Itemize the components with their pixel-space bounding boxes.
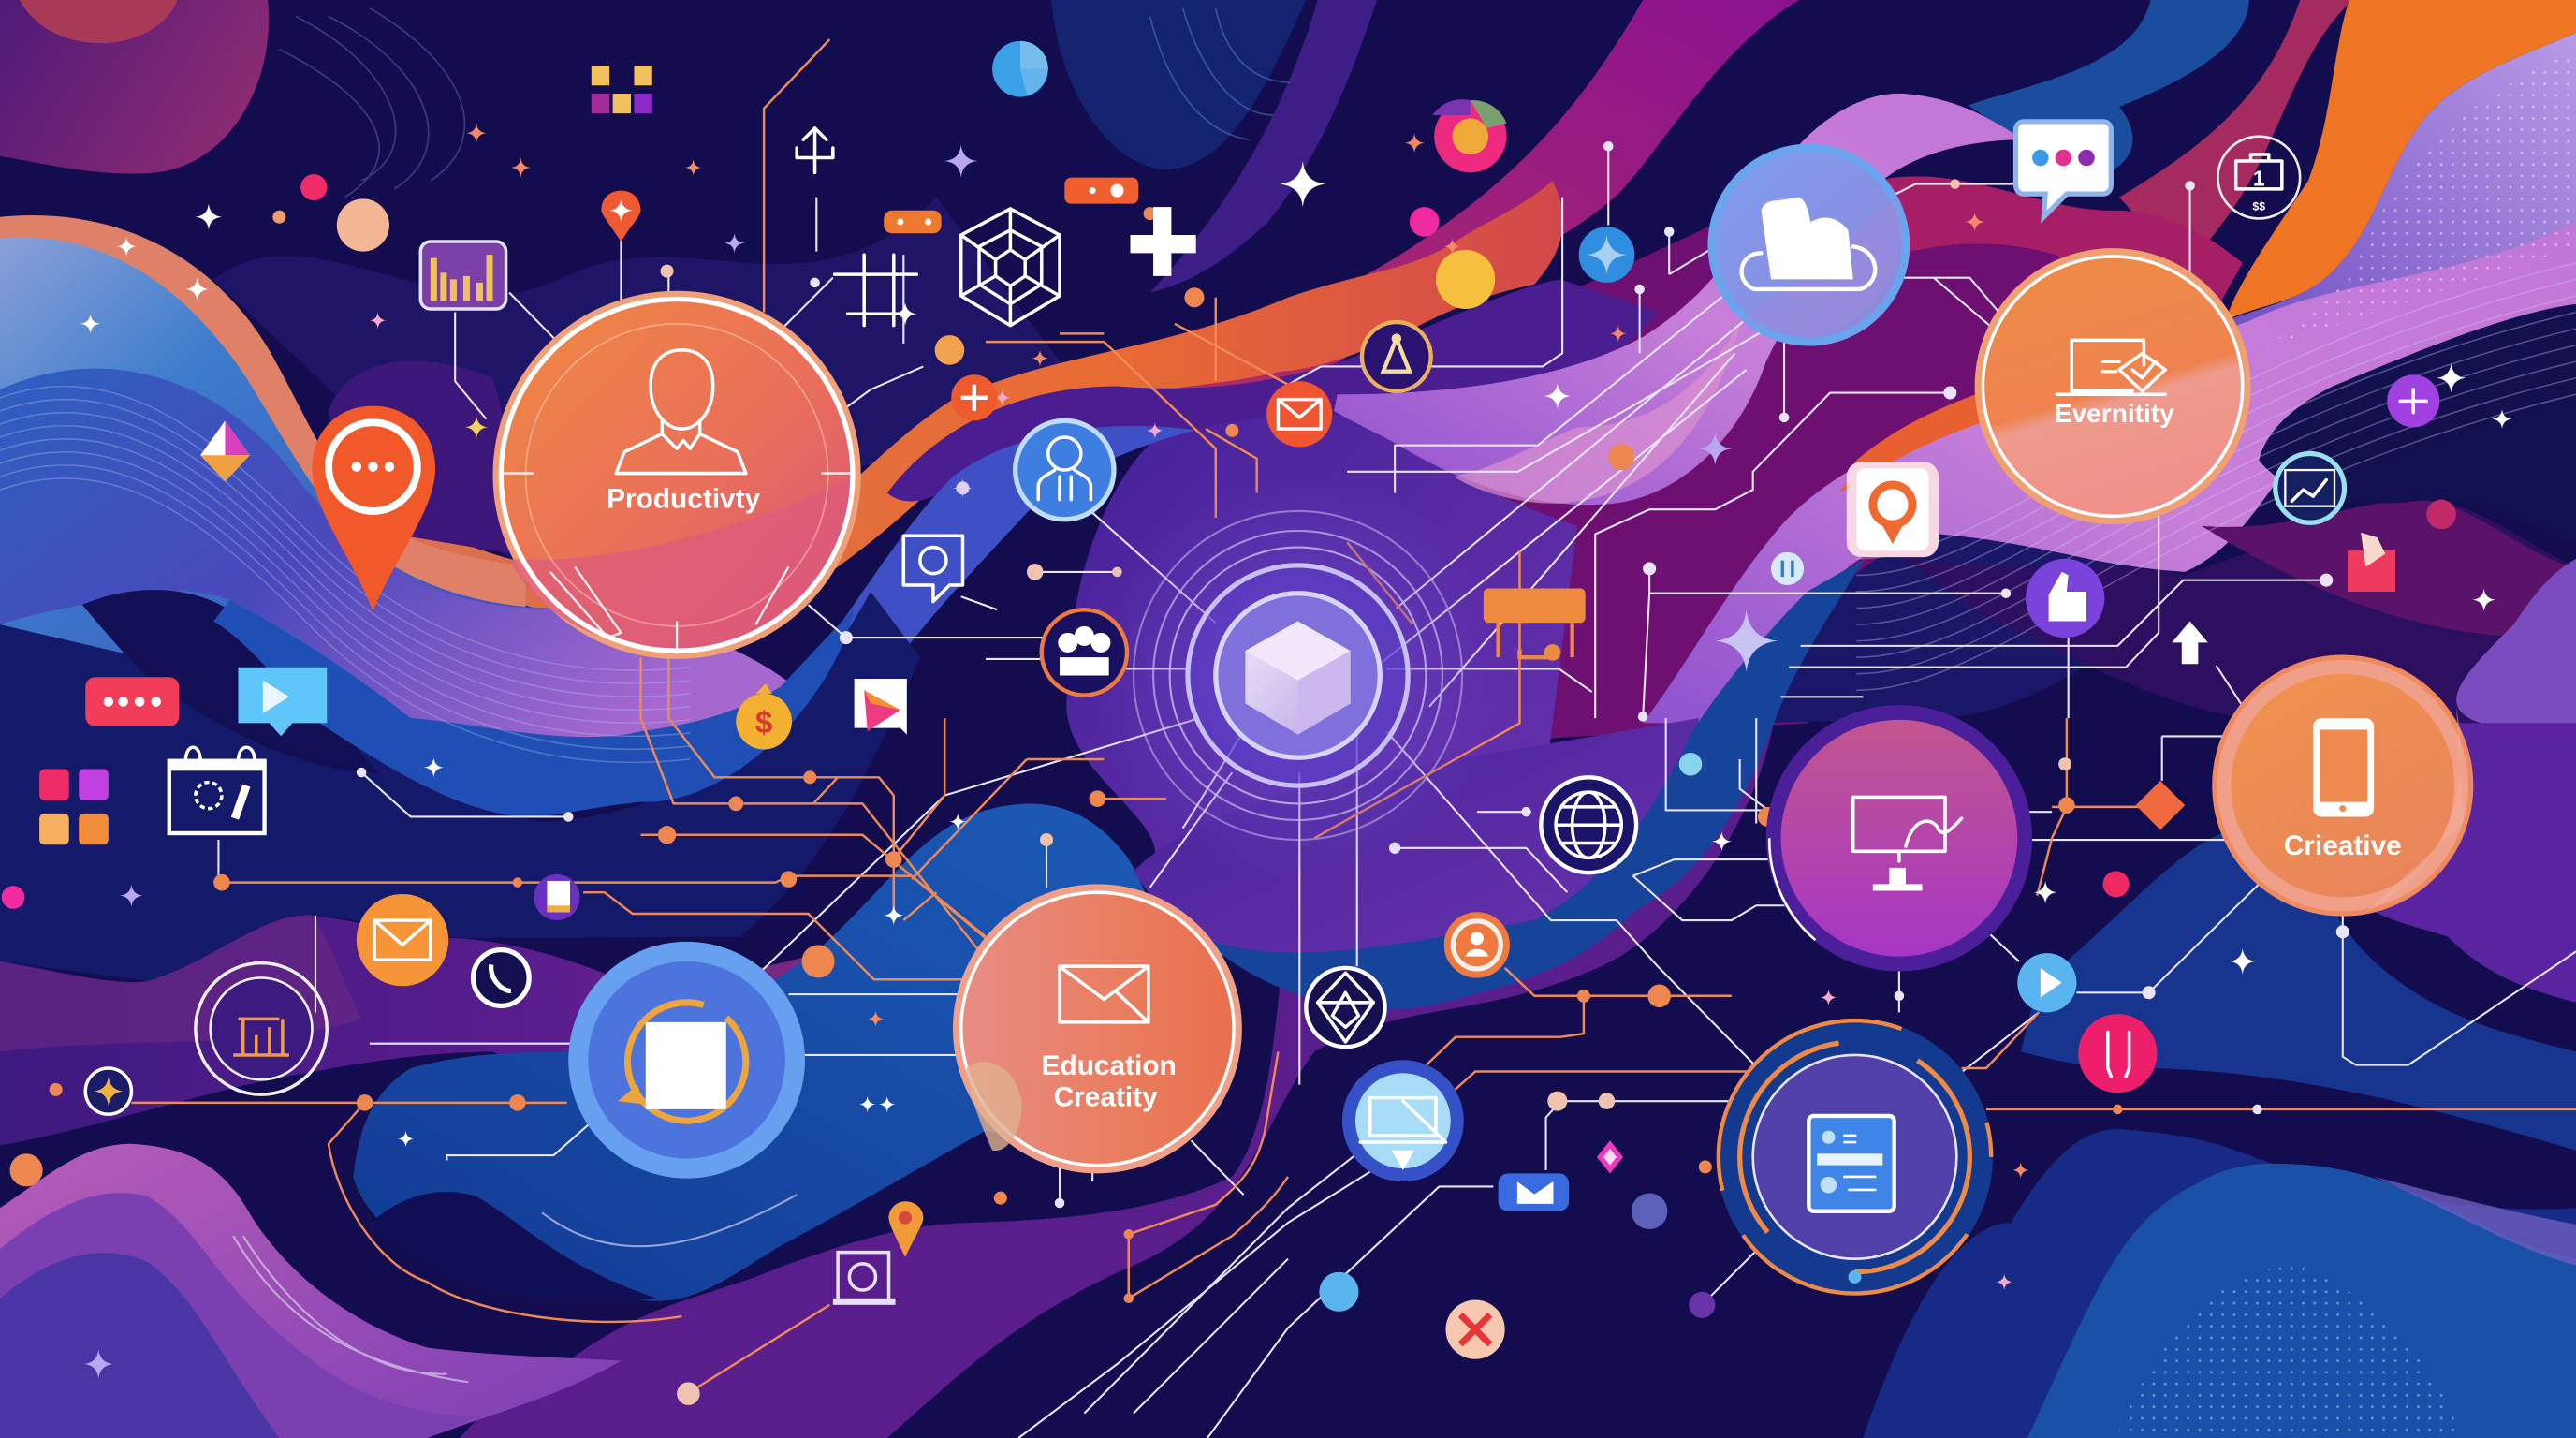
icon: video bubble: [238, 668, 327, 736]
icon: orange bench: [1484, 588, 1586, 661]
node: Education Creatity: [956, 888, 1238, 1170]
icon: play badge: [2017, 953, 2076, 1012]
icon: monitor: [1853, 797, 1962, 861]
left wave: [0, 592, 920, 981]
bottom-left lilac wave: [0, 1144, 621, 1438]
icon: chart ring: [2276, 453, 2345, 522]
icon: red cross: [1445, 1300, 1505, 1359]
icon: person orange ring: [1447, 916, 1506, 975]
icon: triangle ring: [1362, 322, 1431, 391]
decorative dots: [2, 174, 2456, 1318]
icon: briefcase ring: [2217, 137, 2300, 218]
icon: compass diamond: [1306, 968, 1385, 1047]
label: Evernitity: Evernitity: [2055, 399, 2174, 428]
icon: plus: [1131, 207, 1196, 276]
icon: square camera: [833, 1253, 896, 1305]
icon: small info circle: [1771, 552, 1804, 585]
icon: dollar coin: $: [755, 706, 773, 741]
icon: yellow ball: [1436, 250, 1495, 309]
icon: purple plus: [2387, 374, 2439, 427]
icon: orange pin: [889, 1201, 923, 1257]
icon: chat bubble: [2016, 122, 2111, 217]
icon: doc badge: [534, 874, 580, 920]
icon: phone: [2313, 718, 2374, 816]
icon: orange diamond: [2136, 781, 2185, 829]
right lower waves: [2300, 723, 2576, 1003]
icon: team ring: [1042, 609, 1127, 696]
icon: person badge: [1016, 420, 1114, 520]
icon: envelope: [1060, 966, 1149, 1022]
icon: building ring: [196, 963, 327, 1094]
icon: screen with check: [2056, 340, 2165, 394]
icon: phone ring: [473, 950, 529, 1005]
icon: briefcase ring: $$: [2252, 200, 2265, 213]
icon: arrows cross: [797, 128, 833, 172]
icon: chat square: [903, 536, 962, 601]
node: central cube: [1092, 470, 1503, 881]
icon: mail orange: [357, 894, 448, 986]
wave line texture: [0, 8, 2576, 762]
icon: laptop badge: [1342, 1060, 1464, 1181]
icon: grid hash: [835, 255, 916, 326]
icon: bar chart: [420, 242, 506, 309]
icon: red message: [85, 677, 179, 726]
icon: location square: [1847, 462, 1939, 557]
icon: pills: [884, 178, 1138, 233]
icon: pie blue: [992, 41, 1048, 97]
icon: mail pill: [1499, 1173, 1569, 1211]
icon: person: [616, 350, 746, 474]
label: Education Creatity: Education: [1042, 1050, 1177, 1081]
icon: up arrow: [2172, 622, 2208, 664]
icon: briefcase ring: 1: [2253, 166, 2265, 190]
node: document: [1717, 1019, 1993, 1295]
icon: diamond gem: [200, 420, 250, 481]
icon: colour tiles: [39, 770, 109, 844]
node: Crieative: [2215, 657, 2471, 914]
icon: hexagon web: [961, 209, 1060, 326]
icon: play tile: [855, 679, 907, 735]
icon: dollar coin: [736, 683, 792, 749]
icon: balloon: [337, 198, 389, 252]
icon: pink tuning: [2078, 1014, 2157, 1093]
icon: star pin: [601, 191, 640, 242]
icon: star badge: [1579, 227, 1634, 283]
label: Crieative: Crieative: [2284, 830, 2402, 861]
node: blue sync document: [568, 942, 805, 1179]
icon: cube: [1245, 622, 1351, 735]
icon: map pin chat: [312, 406, 435, 611]
icon: globe: [1541, 777, 1636, 873]
icon: thumbs up: [2026, 559, 2104, 638]
node: Evernitity: [1978, 252, 2247, 521]
icon: calendar: [169, 747, 265, 833]
icon: pink tag: [2348, 533, 2395, 592]
node: purple monitor: [1766, 705, 2032, 971]
label: Productivty: Productivty: [607, 483, 761, 514]
connector nodes: [10, 141, 2349, 1405]
icon: color squares: [592, 66, 652, 113]
icon: cloud: [1761, 198, 1853, 279]
icon: mail badge: [1266, 381, 1332, 447]
icon: pink diamond star: [1597, 1140, 1623, 1173]
icon: orange plus badge: [951, 374, 997, 420]
label: Education Creatity: Creatity: [1054, 1081, 1158, 1112]
icon: card: [1808, 1116, 1895, 1211]
icon: star compass: [85, 1068, 131, 1114]
node: cloud: [1712, 148, 1906, 342]
icon: donut chart: [1432, 99, 1506, 163]
node: Productivity: [493, 291, 861, 659]
